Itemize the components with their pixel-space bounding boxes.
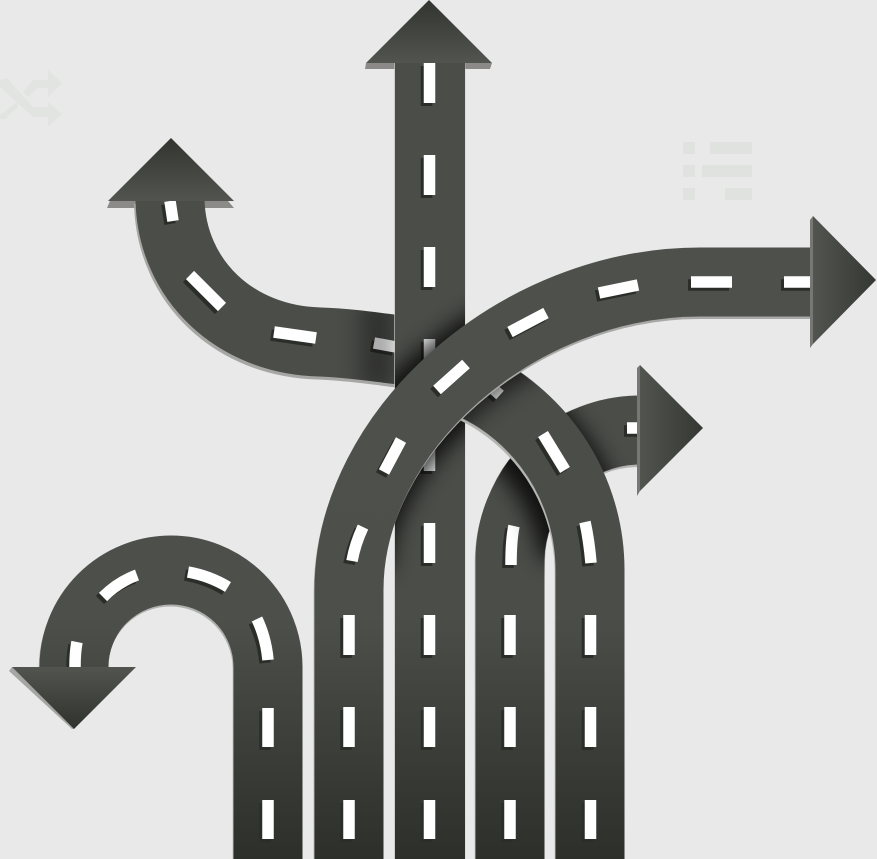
road: right short arrow	[474, 365, 703, 859]
road: long right arrow	[346, 216, 876, 859]
road: U-turn arrow	[9, 570, 268, 859]
road: central straight up arrow	[365, 0, 492, 859]
road: upper-left arrow	[107, 138, 400, 390]
icon: list watermark	[683, 142, 752, 200]
road: arch into the junction	[460, 372, 624, 859]
icon: shuffle arrows watermark	[0, 70, 62, 127]
